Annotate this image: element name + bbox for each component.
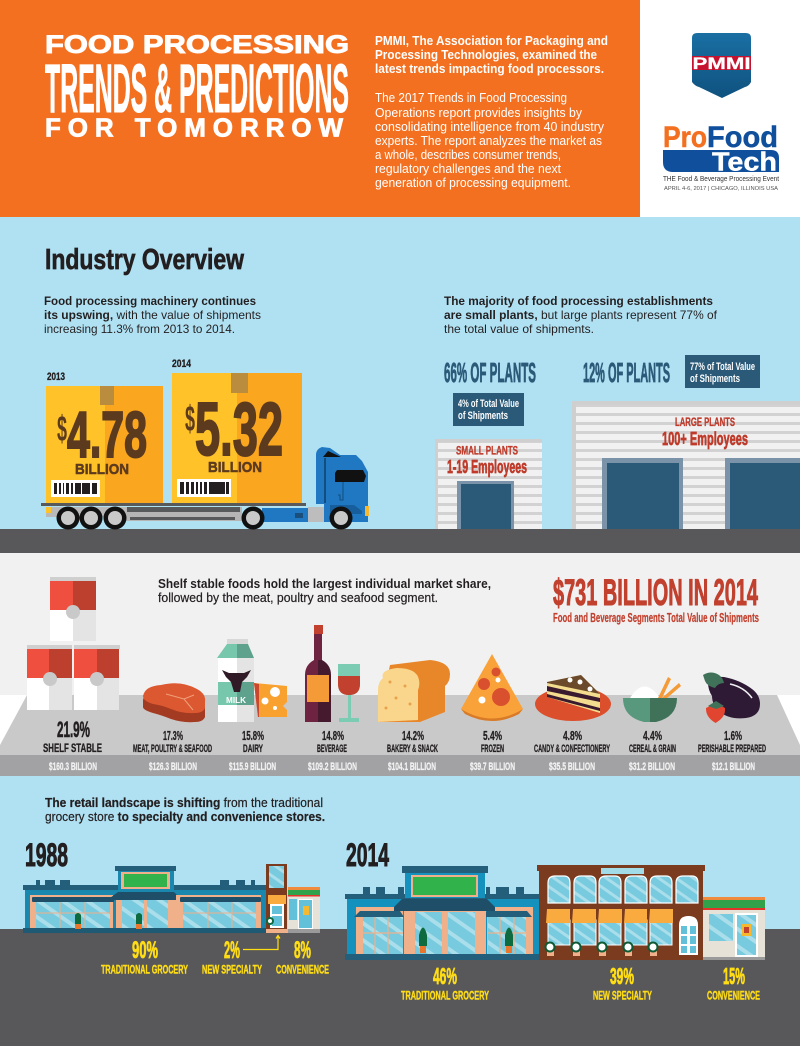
intro text: PMMI, The Association for Packaging and	[375, 34, 608, 48]
callout: 4% of value	[453, 393, 524, 426]
chart: truck with shipment boxes	[41, 358, 369, 530]
icon: milk and cheese: MILK	[226, 696, 246, 705]
stat labels: 2014: 46%	[433, 963, 457, 989]
arrow: 2% to specialty store	[243, 936, 280, 950]
icon: PMMI logo: PMMI	[692, 54, 750, 73]
panel: 1988 retail	[23, 837, 329, 976]
box: 2014 shipments	[172, 358, 302, 503]
chart labels: segments	[43, 717, 766, 773]
text: shelf stable intro: followed by the meat, poultry and seafood segment.	[158, 591, 438, 605]
title	[45, 31, 349, 142]
box: 2013 shipments: BILLION	[75, 461, 129, 478]
icon: 1988 grocery store	[23, 866, 266, 933]
box: 2014 shipments: 5.32	[195, 387, 283, 471]
text: retail landscape intro: grocery store to specialty and convenience stores.	[45, 810, 325, 824]
intro text: experts. The report analyzes the market as	[375, 134, 602, 148]
title: FOOD PROCESSING	[45, 31, 349, 59]
panel: large plants	[572, 355, 800, 529]
label: dairy: $115.9 BILLION	[229, 761, 276, 773]
label: frozen: $39.7 BILLION	[470, 761, 515, 773]
label: cereal: 4.4%	[643, 728, 662, 743]
label: beverage	[308, 728, 357, 773]
callout: 77% of value: 77% of Total Value	[690, 361, 755, 373]
icon: ProFood Tech logo: Food	[707, 121, 778, 154]
intro text: latest trends impacting food processors.	[375, 62, 604, 76]
icon: large plant building: LARGE PLANTS	[675, 417, 735, 429]
panel: large plants: 12% OF PLANTS	[583, 357, 670, 388]
intro text: consolidating intelligence from 40 industry	[375, 120, 605, 134]
icon: eggplant and strawberry	[703, 672, 760, 723]
label: shelf stable: $160.3 BILLION	[49, 761, 97, 773]
icon: ProFood Tech logo: THE Food & Beverage Processing Event	[663, 176, 779, 183]
intro text: The 2017 Trends in Food Processing	[375, 91, 567, 105]
title: FOR TOMORROW	[45, 112, 343, 142]
label: shelf stable: SHELF STABLE	[43, 741, 102, 755]
callout: 77% of value: of Shipments	[690, 373, 740, 385]
label: perishable: $12.1 BILLION	[712, 761, 755, 773]
box: 2014 shipments: $	[185, 398, 195, 439]
label: meat: MEAT, POULTRY & SEAFOOD	[133, 743, 212, 755]
icon: 2014 grocery store	[345, 866, 540, 960]
label: beverage: 14.8%	[322, 728, 344, 743]
stat labels: 1988: CONVENIENCE	[276, 962, 329, 976]
label: meat: $126.3 BILLION	[149, 761, 197, 773]
label: bakery: BAKERY & SNACK	[387, 743, 438, 755]
stat labels: 2014: CONVENIENCE	[707, 988, 760, 1002]
icon: cake	[535, 675, 611, 721]
label: beverage: $109.2 BILLION	[308, 761, 357, 773]
label: dairy	[229, 728, 276, 773]
icon: truck	[41, 447, 369, 530]
stat labels: 1988: TRADITIONAL GROCERY	[101, 962, 188, 976]
label: beverage: BEVERAGE	[317, 743, 347, 755]
label: cereal	[629, 728, 676, 773]
stat labels: 1988: 2%	[224, 937, 240, 964]
callout: 77% of value	[685, 355, 760, 388]
text: machinery growth: increasing 11.3% from 2013 to 2014.	[44, 322, 235, 336]
label: cereal: $31.2 BILLION	[629, 761, 675, 773]
panel: small plants	[435, 357, 542, 529]
box: 2013 shipments: 4.78	[67, 398, 147, 471]
label: meat: 17.3%	[163, 728, 183, 743]
box: 2014 shipments: 2014	[172, 358, 192, 370]
label: dairy: 15.8%	[242, 728, 264, 743]
intro text	[375, 34, 608, 190]
label: candy: $35.5 BILLION	[549, 761, 595, 773]
icon: ProFood Tech logo: APRIL 4-6, 2017 | CHICAGO, ILLINOIS USA	[664, 186, 778, 192]
icon: bread	[378, 660, 450, 722]
panel: header	[0, 0, 640, 217]
icon: steak	[143, 683, 205, 722]
intro text: Processing Technologies, examined the	[375, 48, 597, 62]
stat labels: 2014	[401, 963, 760, 1002]
text: plant size: The majority of food processing establishments	[444, 294, 713, 308]
icon: small plant building: 1-19 Employees	[447, 457, 527, 477]
stat labels: 1988	[101, 937, 329, 976]
icon: wine bottle and glass	[305, 625, 360, 722]
heading: $731 billion	[553, 572, 759, 625]
heading: 2014: 2014	[346, 837, 389, 873]
icon: milk and cheese	[217, 639, 287, 722]
stat labels: 2014: 39%	[610, 963, 634, 989]
icon: soup cans	[27, 577, 120, 710]
icon: rice bowl	[623, 677, 681, 722]
stat labels: 1988: 90%	[132, 937, 158, 964]
text: shelf stable intro	[158, 577, 491, 605]
icon: PMMI logo	[692, 33, 751, 98]
label: frozen	[470, 728, 515, 773]
label: frozen: 5.4%	[483, 728, 502, 743]
text: machinery growth: Food processing machinery continues	[44, 294, 256, 308]
text: 66% OF PLANTS	[444, 357, 536, 388]
stat labels: 2014: NEW SPECIALTY	[593, 988, 652, 1002]
callout: 4% of value: of Shipments	[458, 410, 508, 422]
icon: small plant building	[435, 439, 542, 529]
label: shelf stable: 21.9%	[57, 717, 90, 742]
heading: Industry Overview: Industry Overview	[45, 244, 244, 276]
icon: pizza	[461, 654, 523, 721]
label: meat	[133, 728, 212, 773]
stat labels: 1988: NEW SPECIALTY	[202, 962, 262, 976]
icon: ProFood Tech logo	[663, 121, 779, 192]
icon: small plant building: SMALL PLANTS	[456, 446, 518, 458]
label: perishable: 1.6%	[724, 728, 742, 743]
icon: 1988 convenience store	[288, 887, 320, 933]
text: machinery growth	[44, 294, 261, 336]
intro text: generation of processing equipment.	[375, 176, 571, 190]
heading: 1988: 1988	[25, 837, 68, 873]
stat labels: 2014: 15%	[723, 963, 745, 989]
label: shelf stable	[43, 717, 102, 773]
callout: 4% of value: 4% of Total Value	[458, 398, 519, 410]
box: 2014 shipments: BILLION	[208, 459, 262, 476]
label: candy: 4.8%	[563, 728, 582, 743]
text: retail landscape intro: The retail landscape is shifting from the traditional	[45, 796, 323, 810]
box: 2013 shipments: 2013	[47, 371, 65, 383]
intro text: regulatory challenges and the next	[375, 162, 562, 176]
label: frozen: FROZEN	[481, 743, 504, 755]
icon: large plant building: 100+ Employees	[662, 429, 748, 449]
label: bakery: $104.1 BILLION	[388, 761, 436, 773]
chart labels: segments: CEREAL & GRAIN	[629, 743, 676, 755]
intro text: a whole, describes consumer trends,	[375, 148, 561, 162]
label: candy	[534, 728, 610, 773]
icon: large plant building	[572, 401, 800, 529]
text: plant size: the total value of shipments.	[444, 322, 594, 336]
label: bakery: 14.2%	[402, 728, 424, 743]
panel: 2014 retail	[345, 837, 765, 1002]
text: plant size: are small plants, but large plants represent 77% of	[444, 308, 718, 322]
intro text: Operations report provides insights by	[375, 106, 583, 120]
box: 2013 shipments: $	[57, 408, 67, 449]
text: retail landscape intro	[45, 796, 325, 824]
icon: 2014 specialty store	[537, 865, 705, 960]
icon: ProFood Tech logo: Tech	[712, 146, 777, 176]
icon: 2014 convenience store	[703, 897, 765, 960]
box: 2013 shipments	[46, 371, 163, 503]
stat labels: 2014: TRADITIONAL GROCERY	[401, 988, 489, 1002]
market segment platform	[0, 695, 800, 776]
text: plant size	[444, 294, 718, 336]
label: bakery	[387, 728, 438, 773]
label: perishable	[698, 728, 766, 773]
icon: 1988 specialty store	[266, 864, 288, 933]
label: candy: CANDY & CONFECTIONERY	[534, 743, 610, 755]
icon: ProFood Tech logo: Pro	[663, 121, 707, 154]
label: dairy: DAIRY	[243, 743, 263, 755]
text: machinery growth: its upswing, with the value of shipments	[44, 308, 261, 322]
stat labels: 1988: 8%	[294, 937, 311, 964]
text: shelf stable intro: Shelf stable foods hold the largest individual market share,	[158, 577, 491, 591]
